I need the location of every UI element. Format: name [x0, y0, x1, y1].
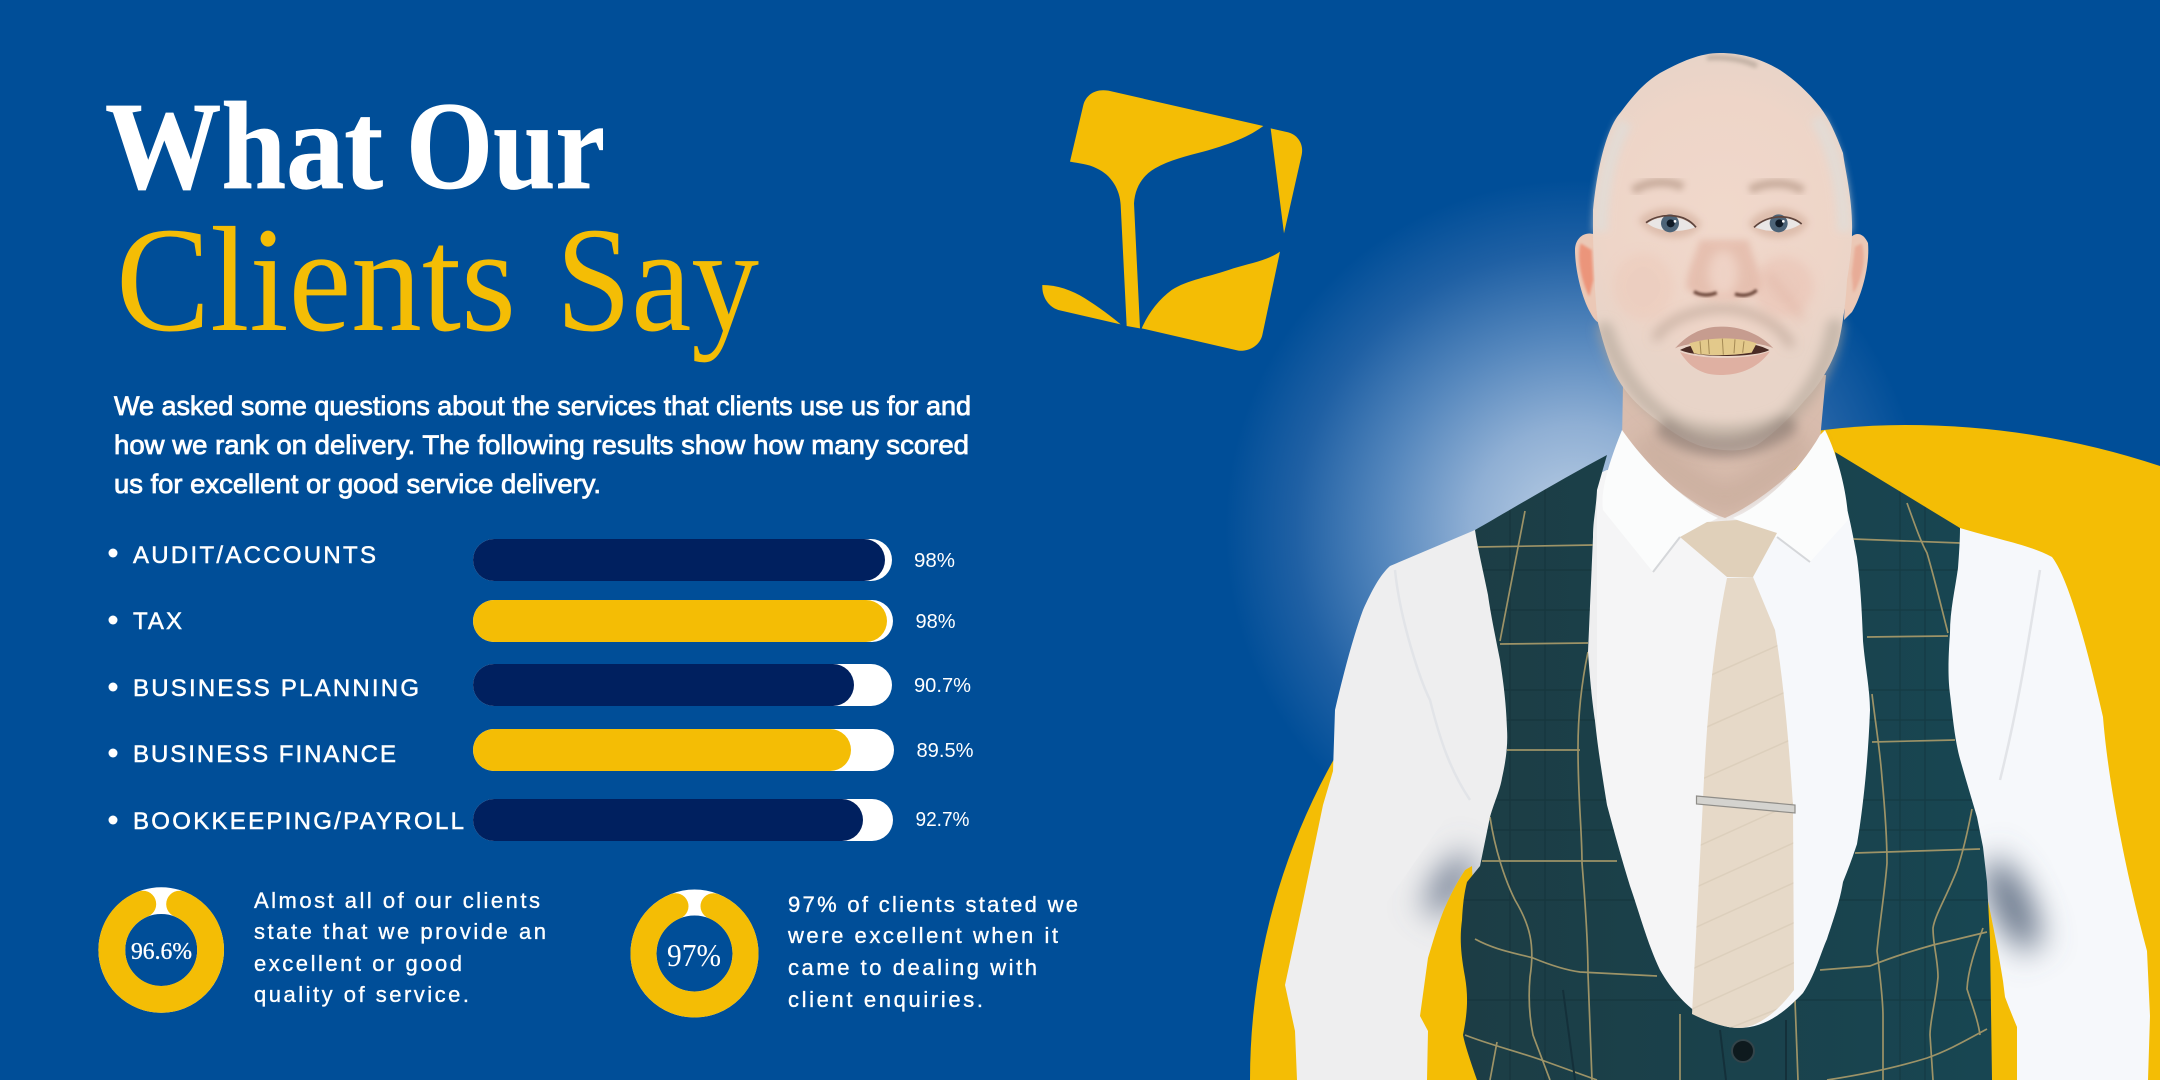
background glow	[1225, 180, 1925, 880]
intro paragraph	[114, 391, 971, 499]
title line: Clients Say: Clients	[116, 197, 516, 363]
intro paragraph: us for excellent or good service delivery.	[114, 469, 601, 499]
text: donut 2 caption	[787, 892, 1078, 1012]
logo icon	[1042, 90, 1302, 351]
intro paragraph: We asked some questions about the services that clients use us for and	[114, 391, 971, 421]
hair at temples	[1601, 118, 1844, 232]
bar chart	[108, 539, 974, 841]
bar row: audit/accounts	[108, 539, 955, 581]
bar row: bookkeeping/payroll	[108, 799, 970, 841]
donut: 97%: 97%	[667, 937, 721, 973]
eyes	[1646, 214, 1802, 232]
brows	[1633, 182, 1803, 191]
title	[105, 78, 759, 363]
waistcoat button	[1732, 1040, 1754, 1062]
title line: What Our: What	[105, 78, 383, 216]
donut: 96.6%: 96.6%	[131, 939, 192, 965]
bar row: business finance: 89.5%	[916, 740, 974, 762]
neck	[1622, 375, 1826, 518]
ear shading	[1579, 243, 1593, 297]
title line: Clients Say: Say	[556, 197, 759, 363]
collar	[1602, 430, 1848, 572]
tie	[1680, 520, 1800, 1040]
collar edges	[1653, 537, 1810, 572]
neck stubble	[1640, 440, 1805, 500]
title line: What Our: Our	[406, 78, 605, 216]
bar row: audit/accounts: 98%	[914, 550, 955, 572]
bar row: tax	[108, 600, 956, 642]
tie clip	[1696, 796, 1795, 813]
text: donut 1 caption: quality of service.	[254, 982, 469, 1007]
bar row: business planning: BUSINESS PLANNING	[133, 675, 419, 702]
mouth	[1675, 327, 1773, 375]
text: donut 1 caption: state that we provide an	[254, 919, 546, 944]
text: donut 2 caption: client enquiries.	[788, 987, 983, 1012]
text: donut 1 caption: Almost all of our clients	[254, 888, 540, 913]
donut: 97%	[643, 902, 746, 1005]
stubble	[1605, 308, 1835, 447]
eye sockets	[1638, 208, 1808, 238]
ears	[1575, 233, 1600, 323]
bar row: tax: TAX	[133, 608, 182, 635]
text: donut 2 caption: 97% of clients stated we	[788, 892, 1078, 917]
bar row: bookkeeping/payroll: 92.7%	[916, 809, 970, 831]
text: donut 1 caption: excellent or good	[254, 951, 462, 976]
bar row: business finance: BUSINESS FINANCE	[133, 741, 396, 768]
facial features	[1579, 182, 1864, 447]
head	[1593, 53, 1852, 450]
waistcoat	[1450, 450, 2010, 1080]
bar row: audit/accounts: AUDIT/ACCOUNTS	[133, 542, 376, 569]
text: donut 2 caption: were excellent when it	[787, 923, 1058, 948]
nose	[1686, 240, 1802, 320]
bar row: bookkeeping/payroll: BOOKKEEPING/PAYROLL	[133, 808, 464, 835]
text: donut 1 caption	[254, 888, 546, 1007]
portrait of a man	[1280, 53, 2160, 1080]
bar row: business planning	[108, 664, 971, 706]
bar row: business finance	[108, 729, 974, 771]
intro paragraph: how we rank on delivery. The following results show how many scored	[114, 430, 969, 460]
donut: 96.6%	[112, 901, 211, 999]
yellow circle backdrop	[1250, 425, 2160, 1080]
bar row: tax: 98%	[916, 611, 956, 633]
bar row: business planning: 90.7%	[914, 675, 971, 697]
hairline stubble	[1707, 57, 1757, 66]
cheek tint	[1753, 257, 1813, 317]
shirt	[1280, 460, 2160, 1080]
text: donut 2 caption: came to dealing with	[788, 955, 1037, 980]
